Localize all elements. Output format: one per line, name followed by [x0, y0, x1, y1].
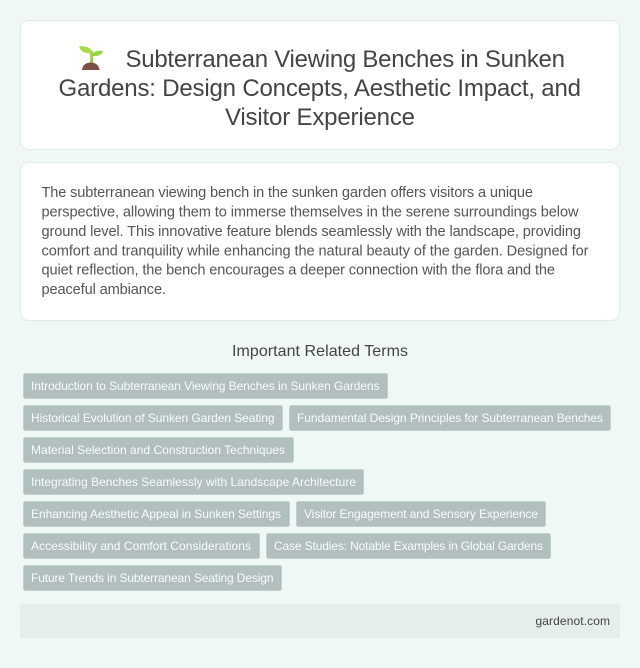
- title text: Subterranean Viewing Benches in Sunken: [126, 46, 565, 73]
- panel: description card: [20, 162, 620, 320]
- tag: design principles: [290, 406, 610, 430]
- description text: quiet reflection, the bench encourages a deeper connection with the flora and the: [42, 263, 555, 279]
- tag: historical evolution: [24, 406, 282, 430]
- footer: [20, 604, 620, 638]
- title text: Visitor Experience: [225, 104, 415, 131]
- tag: accessibility: [24, 534, 260, 558]
- icon: seedling: [79, 46, 103, 70]
- description text: perspective, allowing them to immerse themselves in the serene surroundings below: [42, 204, 579, 220]
- tag: visitor engagement: Visitor Engagement and Sensory Experience: [304, 507, 538, 521]
- tag: integrating: Integrating Benches Seamlessly with Landscape Architecture: [31, 475, 356, 489]
- tag: accessibility: Accessibility and Comfort Considerations: [31, 539, 251, 553]
- description text: ground level. This innovative feature blends seamlessly with the landscape, providing: [42, 224, 581, 240]
- tag: introduction: [24, 374, 388, 398]
- tag: case studies: [266, 534, 550, 558]
- tag: aesthetic appeal: [24, 502, 290, 526]
- tag: visitor engagement: [296, 502, 546, 526]
- description text: comfort and tranquility while enhancing the natural beauty of the garden. Designed for: [42, 243, 589, 259]
- tag: materials: Material Selection and Construction Techniques: [31, 443, 285, 457]
- title text: [58, 46, 581, 131]
- tag: case studies: Case Studies: Notable Examples in Global Gardens: [274, 539, 543, 553]
- tag: aesthetic appeal: Enhancing Aesthetic Appeal in Sunken Settings: [31, 507, 281, 521]
- footer: gardenot.com: [536, 614, 610, 628]
- description text: peaceful ambiance.: [42, 282, 166, 298]
- tag list: [24, 374, 610, 590]
- tag: introduction: Introduction to Subterranean Viewing Benches in Sunken Gardens: [31, 379, 380, 393]
- panel: title card: [20, 20, 620, 150]
- description text: [42, 185, 589, 298]
- heading: important related terms: Important Related Terms: [232, 343, 408, 360]
- tag: integrating: [24, 470, 364, 494]
- title text: Gardens: Design Concepts, Aesthetic Impact, and: [58, 75, 581, 102]
- tag: future trends: Future Trends in Subterranean Seating Design: [31, 571, 274, 585]
- description text: The subterranean viewing bench in the sunken garden offers visitors a unique: [42, 185, 533, 201]
- tag: future trends: [24, 566, 282, 590]
- tag: historical evolution: Historical Evolution of Sunken Garden Seating: [31, 411, 274, 425]
- tag: design principles: Fundamental Design Principles for Subterranean Benches: [297, 411, 603, 425]
- tag: materials: [24, 438, 294, 462]
